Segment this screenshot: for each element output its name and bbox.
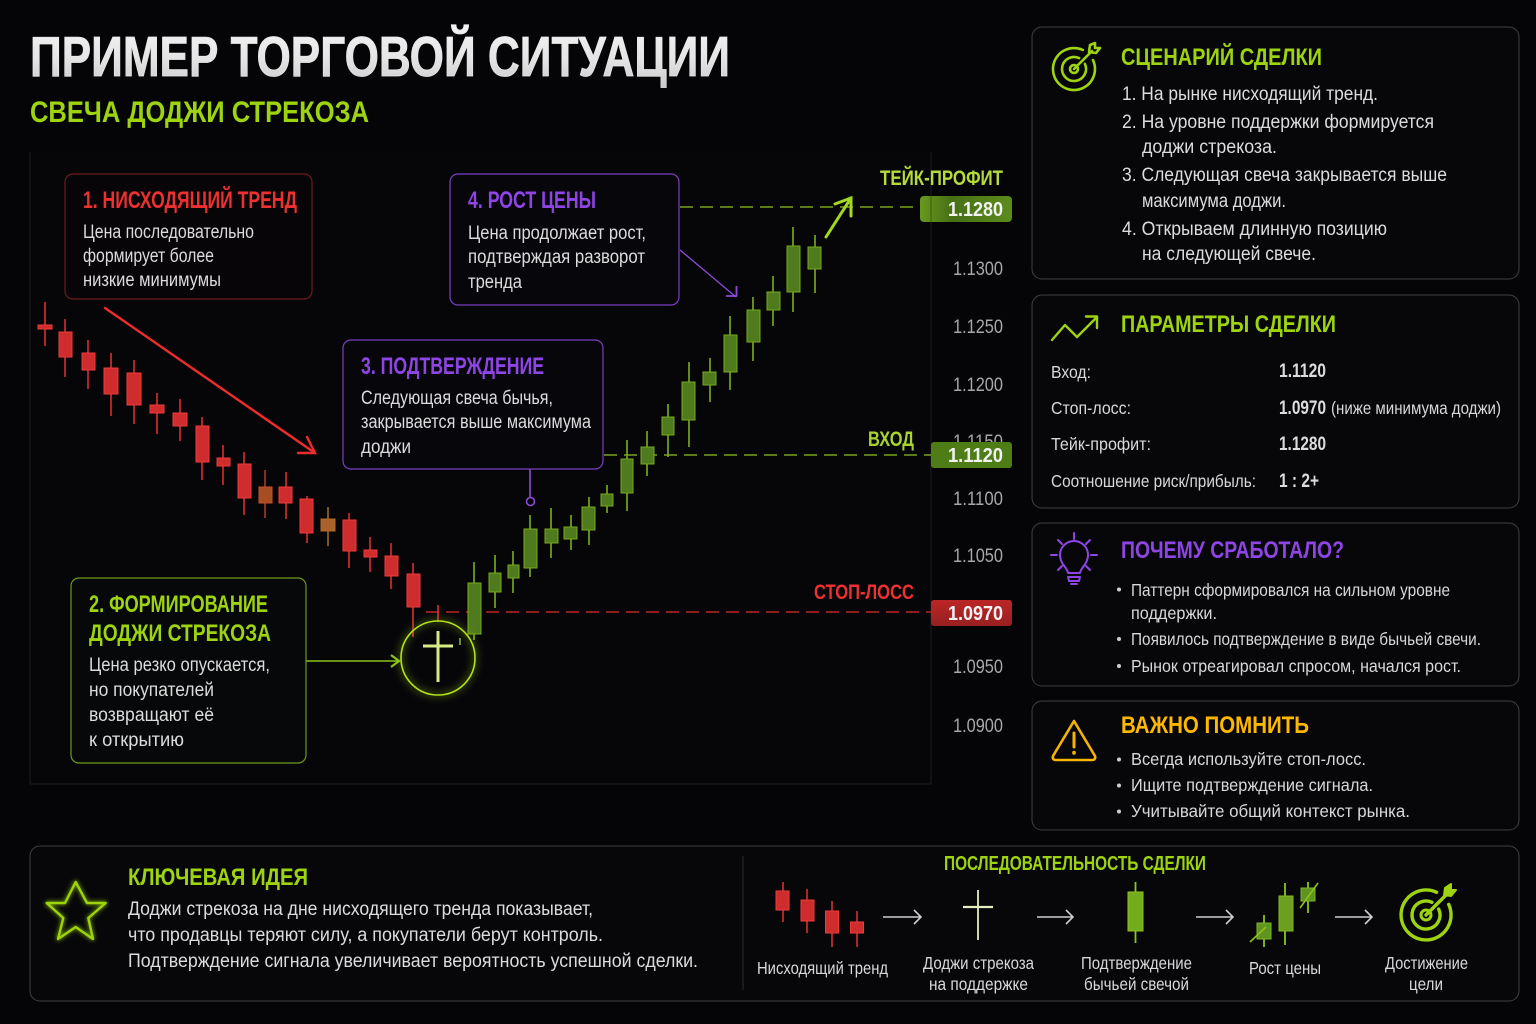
step 4: price growth xyxy=(1249,882,1321,978)
heading: ВАЖНО ПОМНИТЬ xyxy=(1121,712,1309,739)
step 3: confirmation: бычьей свечой xyxy=(1084,974,1189,994)
price axis labels: 1.1250 xyxy=(953,317,1003,338)
price axis labels: 1.0950 xyxy=(953,657,1003,678)
badge: stop-loss price: 1.0970 xyxy=(948,603,1003,625)
price axis labels: 1.1300 xyxy=(953,259,1003,280)
parameter rows: Тейк-профит: xyxy=(1051,434,1151,454)
badge: entry price: 1.1120 xyxy=(948,445,1003,467)
callout 2: doji formation: 2. ФОРМИРОВАНИЕ xyxy=(89,591,268,618)
step 1: downtrend xyxy=(757,882,888,978)
dragonfly doji candle with highlight circle xyxy=(401,621,475,695)
panel: price chart xyxy=(30,152,1012,784)
connector: confirmation callout to candle xyxy=(526,469,534,506)
icon: target xyxy=(1053,43,1100,90)
arrow: step 1 to 2 xyxy=(883,910,921,924)
callout 2: doji formation xyxy=(71,578,306,763)
price axis labels: 1.0900 xyxy=(953,716,1003,737)
icon: rising chart xyxy=(1052,316,1097,340)
callout 1: downtrend: Цена последовательно xyxy=(83,222,254,243)
reminders list: Всегда используйте стоп-лосс. xyxy=(1131,749,1366,769)
step 2: doji: Доджи стрекоза xyxy=(923,953,1034,973)
reminders list: Учитывайте общий контекст рынка. xyxy=(1131,801,1410,821)
panel: trade parameters xyxy=(1032,295,1519,508)
badge: take-profit price xyxy=(920,196,1012,222)
callout 2: doji formation: к открытию xyxy=(89,730,184,751)
badge: entry price xyxy=(931,442,1012,468)
reasons list: Появилось подтверждение в виде бычьей свечи. xyxy=(1131,629,1481,649)
reasons list xyxy=(1117,580,1481,676)
scenario list: 1. На рынке нисходящий тренд. xyxy=(1122,84,1378,105)
parameter rows: 1.1120 xyxy=(1279,361,1326,382)
callout 4: price growth: Цена продолжает рост, xyxy=(468,223,646,244)
callout 1: downtrend: низкие минимумы xyxy=(83,270,221,291)
callout 3: confirmation: закрывается выше максимума xyxy=(361,412,591,433)
orange transitional candles xyxy=(259,470,335,546)
parameter rows: Вход: xyxy=(1051,362,1091,382)
stop-loss level line xyxy=(426,611,931,613)
callout 3: confirmation: 3. ПОДТВЕРЖДЕНИЕ xyxy=(361,353,544,380)
badge: take-profit price: 1.1280 xyxy=(948,199,1003,221)
label: entry: ВХОД xyxy=(868,428,914,451)
callout 1: downtrend xyxy=(65,174,312,299)
parameter rows: 1 : 2+ xyxy=(1279,471,1319,492)
step 5: reach the target: цели xyxy=(1409,974,1443,994)
step 5: reach the target xyxy=(1385,884,1468,994)
reasons list: Паттерн сформировался на сильном уровне xyxy=(1131,580,1450,600)
scenario list: доджи стрекоза. xyxy=(1142,137,1277,158)
heading: trade sequence: ПОСЛЕДОВАТЕЛЬНОСТЬ СДЕЛКИ xyxy=(944,853,1206,875)
callout 2: doji formation: ДОДЖИ СТРЕКОЗА xyxy=(89,620,271,647)
key idea text: Доджи стрекоза на дне нисходящего тренда показывает, xyxy=(128,899,593,920)
arrow: growth callout to candles xyxy=(680,250,736,297)
step 2: doji xyxy=(923,890,1034,994)
entry level line xyxy=(604,454,931,456)
key idea text xyxy=(128,899,698,972)
icon: star xyxy=(47,882,106,939)
title: ПРИМЕР ТОРГОВОЙ СИТУАЦИИ xyxy=(30,24,730,89)
step 1: downtrend: Нисходящий тренд xyxy=(757,958,888,978)
parameter rows: Соотношение риск/прибыль: xyxy=(1051,471,1256,491)
step 5: reach the target: Достижение xyxy=(1385,953,1468,973)
callout 2: doji formation: Цена резко опускается, xyxy=(89,655,270,676)
parameter rows: 1.0970 xyxy=(1279,398,1326,419)
scenario list: 2. На уровне поддержки формируется xyxy=(1122,112,1434,133)
panel: why it worked xyxy=(1032,523,1519,686)
label: stop-loss: СТОП-ЛОСС xyxy=(814,581,914,604)
callout 1: downtrend: формирует более xyxy=(83,246,214,267)
arrow: step 3 to 4 xyxy=(1196,910,1233,924)
take-profit level line xyxy=(680,206,920,208)
callout 2: doji formation: возвращают её xyxy=(89,705,214,726)
callout 1: downtrend: 1. НИСХОДЯЩИЙ ТРЕНД xyxy=(83,186,297,214)
step 3: confirmation: Подтверждение xyxy=(1081,953,1192,973)
arrow: step 4 to 5 xyxy=(1335,910,1372,924)
step 2: doji: на поддержке xyxy=(929,974,1028,994)
scenario list: на следующей свече. xyxy=(1142,244,1316,265)
callout 3: confirmation: Следующая свеча бычья, xyxy=(361,388,553,409)
callout 3: confirmation: доджи xyxy=(361,437,411,458)
reasons list: поддержки. xyxy=(1131,603,1217,623)
panel: remember xyxy=(1032,701,1519,830)
price axis labels: 1.1200 xyxy=(953,375,1003,396)
callout 4: price growth: тренда xyxy=(468,272,522,293)
heading: ПОЧЕМУ СРАБОТАЛО? xyxy=(1121,537,1344,564)
step 3: confirmation xyxy=(1081,882,1192,994)
heading: СЦЕНАРИЙ СДЕЛКИ xyxy=(1121,43,1322,71)
icon: light bulb xyxy=(1051,533,1097,584)
label: take-profit: ТЕЙК-ПРОФИТ xyxy=(880,166,1003,190)
parameter rows xyxy=(1051,361,1501,492)
price axis labels xyxy=(953,259,1003,737)
parameter rows: 1.1280 xyxy=(1279,434,1326,455)
scenario list: максимума доджи. xyxy=(1142,191,1286,212)
callout 2: doji formation: но покупателей xyxy=(89,680,214,701)
parameter rows: (ниже минимума доджи) xyxy=(1331,398,1501,418)
step 4: price growth: Рост цены xyxy=(1249,958,1321,978)
arrow: downtrend xyxy=(105,308,315,453)
scenario list: 3. Следующая свеча закрывается выше xyxy=(1122,165,1447,186)
badge: stop-loss price xyxy=(931,600,1012,626)
panel: key idea and trade sequence xyxy=(30,846,1519,1001)
heading: key idea: КЛЮЧЕВАЯ ИДЕЯ xyxy=(128,864,308,891)
icon: warning triangle xyxy=(1053,721,1095,760)
callout 4: price growth: 4. РОСТ ЦЕНЫ xyxy=(468,187,596,214)
panel: trade scenario xyxy=(1032,27,1519,279)
callout 3: confirmation xyxy=(343,340,603,469)
price axis labels: 1.1100 xyxy=(953,489,1003,510)
bearish candles xyxy=(38,302,438,637)
price axis labels: 1.1150 xyxy=(953,432,1003,453)
bullish candles xyxy=(468,227,821,640)
arrow: up to take-profit xyxy=(826,198,851,237)
scenario list: 4. Открываем длинную позицию xyxy=(1122,219,1387,240)
price axis labels: 1.1050 xyxy=(953,546,1003,567)
callout 4: price growth xyxy=(450,174,679,305)
parameter rows: Стоп-лосс: xyxy=(1051,398,1131,418)
reminders list xyxy=(1117,749,1410,821)
subtitle: СВЕЧА ДОДЖИ СТРЕКОЗА xyxy=(30,96,369,129)
heading: ПАРАМЕТРЫ СДЕЛКИ xyxy=(1121,311,1336,338)
key idea text: Подтверждение сигнала увеличивает вероятность успешной сделки. xyxy=(128,951,698,972)
reasons list: Рынок отреагировал спросом, начался рост. xyxy=(1131,656,1461,676)
arrow: step 2 to 3 xyxy=(1037,910,1073,924)
key idea text: что продавцы теряют силу, а покупатели берут контроль. xyxy=(128,925,603,946)
scenario list xyxy=(1122,84,1447,265)
reminders list: Ищите подтверждение сигнала. xyxy=(1131,775,1373,795)
arrow: doji callout to doji xyxy=(306,655,399,667)
callout 4: price growth: подтверждая разворот xyxy=(468,247,645,268)
